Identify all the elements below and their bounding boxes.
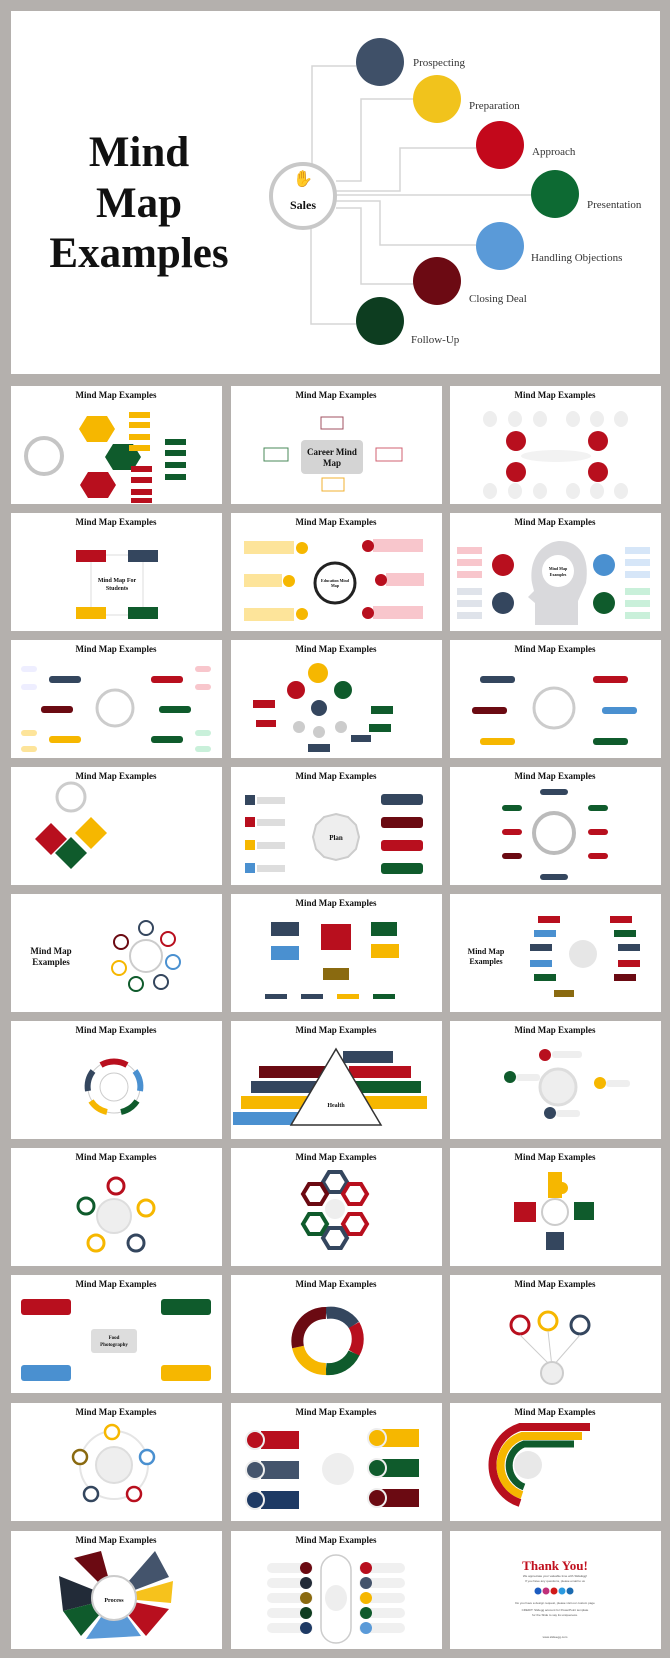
thumbnail r4c2: plan decagon (231, 767, 442, 885)
thumbnail r7c1: financial planning: Mind Map Examples (75, 1152, 157, 1162)
center node: Sales: Sales (290, 198, 316, 212)
thumbnail r10c3: thank you: for the Slide to say its uniqueness. (532, 1613, 578, 1617)
node: Preparation: Preparation (469, 100, 520, 112)
thumbnail r10c3: thank you: We appreciate your valuable time with SlideEgg! (523, 1574, 587, 1578)
node: Prospecting (356, 38, 465, 86)
node: Closing Deal: Closing Deal (469, 293, 527, 305)
title: Map (96, 180, 182, 227)
title: Examples (49, 230, 229, 277)
thumbnail r6c3: gray circle: Mind Map Examples (514, 1025, 596, 1035)
thumbnail r7c1: financial planning (11, 1148, 222, 1266)
thumbnail r3c1: plan/analysis (11, 640, 222, 758)
thumbnail r3c3: target/product (450, 640, 661, 758)
thumbnail r9c2: numbered plan: Mind Map Examples (295, 1407, 377, 1417)
node: Approach: Approach (532, 146, 576, 158)
thumbnail r6c3: gray circle (450, 1021, 661, 1139)
thumbnail r8c1: food photography: Food (109, 1336, 120, 1341)
thumbnail r10c3: thank you: Do you have a design request, please visit our custom page (515, 1601, 595, 1605)
thumbnail r5c2: blocks (231, 894, 442, 1012)
thumbnail r10c3: thank you (450, 1531, 661, 1649)
thumbnail r3c2: circles: Mind Map Examples (295, 644, 377, 654)
center node: Sales: ✋ (293, 169, 313, 188)
thumbnail r2c1: students: Mind Map For (98, 578, 136, 584)
node: Prospecting: Prospecting (413, 57, 465, 69)
thumbnail r1c2: career mind map: Mind Map Examples (295, 390, 377, 400)
thumbnail r2c3: head: Mind Map Examples (514, 517, 596, 527)
thumbnail r10c3: thank you: If you have any questions, please email to us (525, 1579, 585, 1583)
thumbnail r2c2: education (231, 513, 442, 631)
thumbnail r2c1: students: Students (106, 586, 129, 592)
thumbnail r10c1: process (11, 1531, 222, 1649)
thumbnail r2c3: head (450, 513, 661, 631)
thumbnail r10c1: process: Mind Map Examples (75, 1535, 157, 1545)
connectors (311, 66, 531, 324)
node: Handling Objections (476, 222, 622, 270)
thumbnail r4c3: ring pills: Mind Map Examples (514, 771, 596, 781)
thumbnail r1c3: advertising mind map: Mind Map Examples (514, 390, 596, 400)
thumbnail r5c3: action plan: Examples (469, 957, 503, 966)
thumbnail r9c1: quality improvement: Mind Map Examples (75, 1407, 157, 1417)
thumbnail r8c2: donut (231, 1275, 442, 1393)
thumbnail r1c1: sales hexagons: Mind Map Examples (75, 390, 157, 400)
thumbnail r6c2: health pyramid: Mind Map Examples (295, 1025, 377, 1035)
thumbnail r7c3: food groups: Mind Map Examples (514, 1152, 596, 1162)
thumbnail r4c1: diamonds (11, 767, 222, 885)
thumbnail r1c1: sales hexagons (11, 386, 222, 504)
thumbnail r6c1: character ring: Mind Map Examples (75, 1025, 157, 1035)
thumbnail r1c3: advertising mind map (450, 386, 661, 504)
thumbnail r3c3: target/product: Mind Map Examples (514, 644, 596, 654)
thumbnail r5c1: technology: Mind Map (30, 946, 72, 956)
thumbnail r8c3: health procedures: Mind Map Examples (514, 1279, 596, 1289)
thumbnail r9c1: quality improvement (11, 1403, 222, 1521)
thumbnail r2c2: education: Map (331, 583, 340, 588)
thumbnail r2c3: head: Mind Map (549, 566, 568, 571)
thumbnail r10c2: personal identity (231, 1531, 442, 1649)
thumbnail r2c1: students (11, 513, 222, 631)
title (49, 129, 229, 277)
thumbnail r10c3: thank you: Thank You! (522, 1558, 588, 1573)
node: Follow-Up: Follow-Up (411, 334, 460, 346)
node: Handling Objections: Handling Objections (531, 252, 622, 264)
title: Mind (89, 129, 189, 176)
thumbnail r7c2: hexagon wheel (231, 1148, 442, 1266)
node: Approach (476, 121, 576, 169)
thumbnail r10c3: thank you: www.slideegg.com (543, 1635, 568, 1639)
node: Presentation: Presentation (587, 199, 642, 211)
thumbnail r5c1: technology (11, 894, 222, 1012)
thumbnail r8c3: health procedures (450, 1275, 661, 1393)
thumbnail r8c1: food photography (11, 1275, 222, 1393)
thumbnail r7c3: food groups (450, 1148, 661, 1266)
node: Presentation (531, 170, 642, 218)
thumbnail r3c2: circles (231, 640, 442, 758)
thumbnail r2c3: head: Examples (550, 572, 567, 577)
node: Closing Deal (413, 257, 527, 305)
thumbnail r10c3: thank you: CREDIT: Slidegg account for PowerPoint template (522, 1608, 589, 1612)
thumbnail r3c1: plan/analysis: Mind Map Examples (75, 644, 157, 654)
node: Preparation (413, 75, 520, 123)
thumbnail r8c2: donut: Mind Map Examples (295, 1279, 377, 1289)
thumbnail r2c2: education: Mind Map Examples (295, 517, 377, 527)
thumbnail r5c2: blocks: Mind Map Examples (295, 898, 377, 908)
thumbnail r4c2: plan decagon: Plan (329, 834, 343, 842)
thumbnail r9c3: health arcs: Mind Map Examples (514, 1407, 596, 1417)
thumbnail r7c2: hexagon wheel: Mind Map Examples (295, 1152, 377, 1162)
thumbnail r2c2: education: Education Mind (321, 578, 350, 583)
thumbnail r8c1: food photography: Mind Map Examples (75, 1279, 157, 1289)
thumbnail r5c1: technology: Examples (32, 957, 70, 967)
hero panel (11, 11, 660, 374)
node: Follow-Up (356, 297, 460, 346)
thumbnail r1c2: career mind map: Map (323, 458, 341, 468)
thumbnail r4c2: plan decagon: Mind Map Examples (295, 771, 377, 781)
thumbnail r1c2: career mind map: Career Mind (307, 447, 357, 457)
thumbnail r10c1: process: Process (104, 1598, 124, 1604)
thumbnail r6c2: health pyramid (231, 1021, 442, 1139)
thumbnail r10c2: personal identity: Mind Map Examples (295, 1535, 377, 1545)
thumbnail r9c3: health arcs (450, 1403, 661, 1521)
thumbnail r4c3: ring pills (450, 767, 661, 885)
thumbnail r8c1: food photography: Photography (100, 1343, 128, 1348)
thumbnail r6c2: health pyramid: Health (327, 1103, 345, 1109)
thumbnail r5c3: action plan: Mind Map (468, 947, 505, 956)
center node: Sales (271, 164, 335, 228)
thumbnail r4c1: diamonds: Mind Map Examples (75, 771, 157, 781)
thumbnail r6c1: character ring (11, 1021, 222, 1139)
thumbnail r1c2: career mind map (231, 386, 442, 504)
thumbnail r9c2: numbered plan (231, 1403, 442, 1521)
thumbnail r2c1: students: Mind Map Examples (75, 517, 157, 527)
thumbnail r5c3: action plan (450, 894, 661, 1012)
